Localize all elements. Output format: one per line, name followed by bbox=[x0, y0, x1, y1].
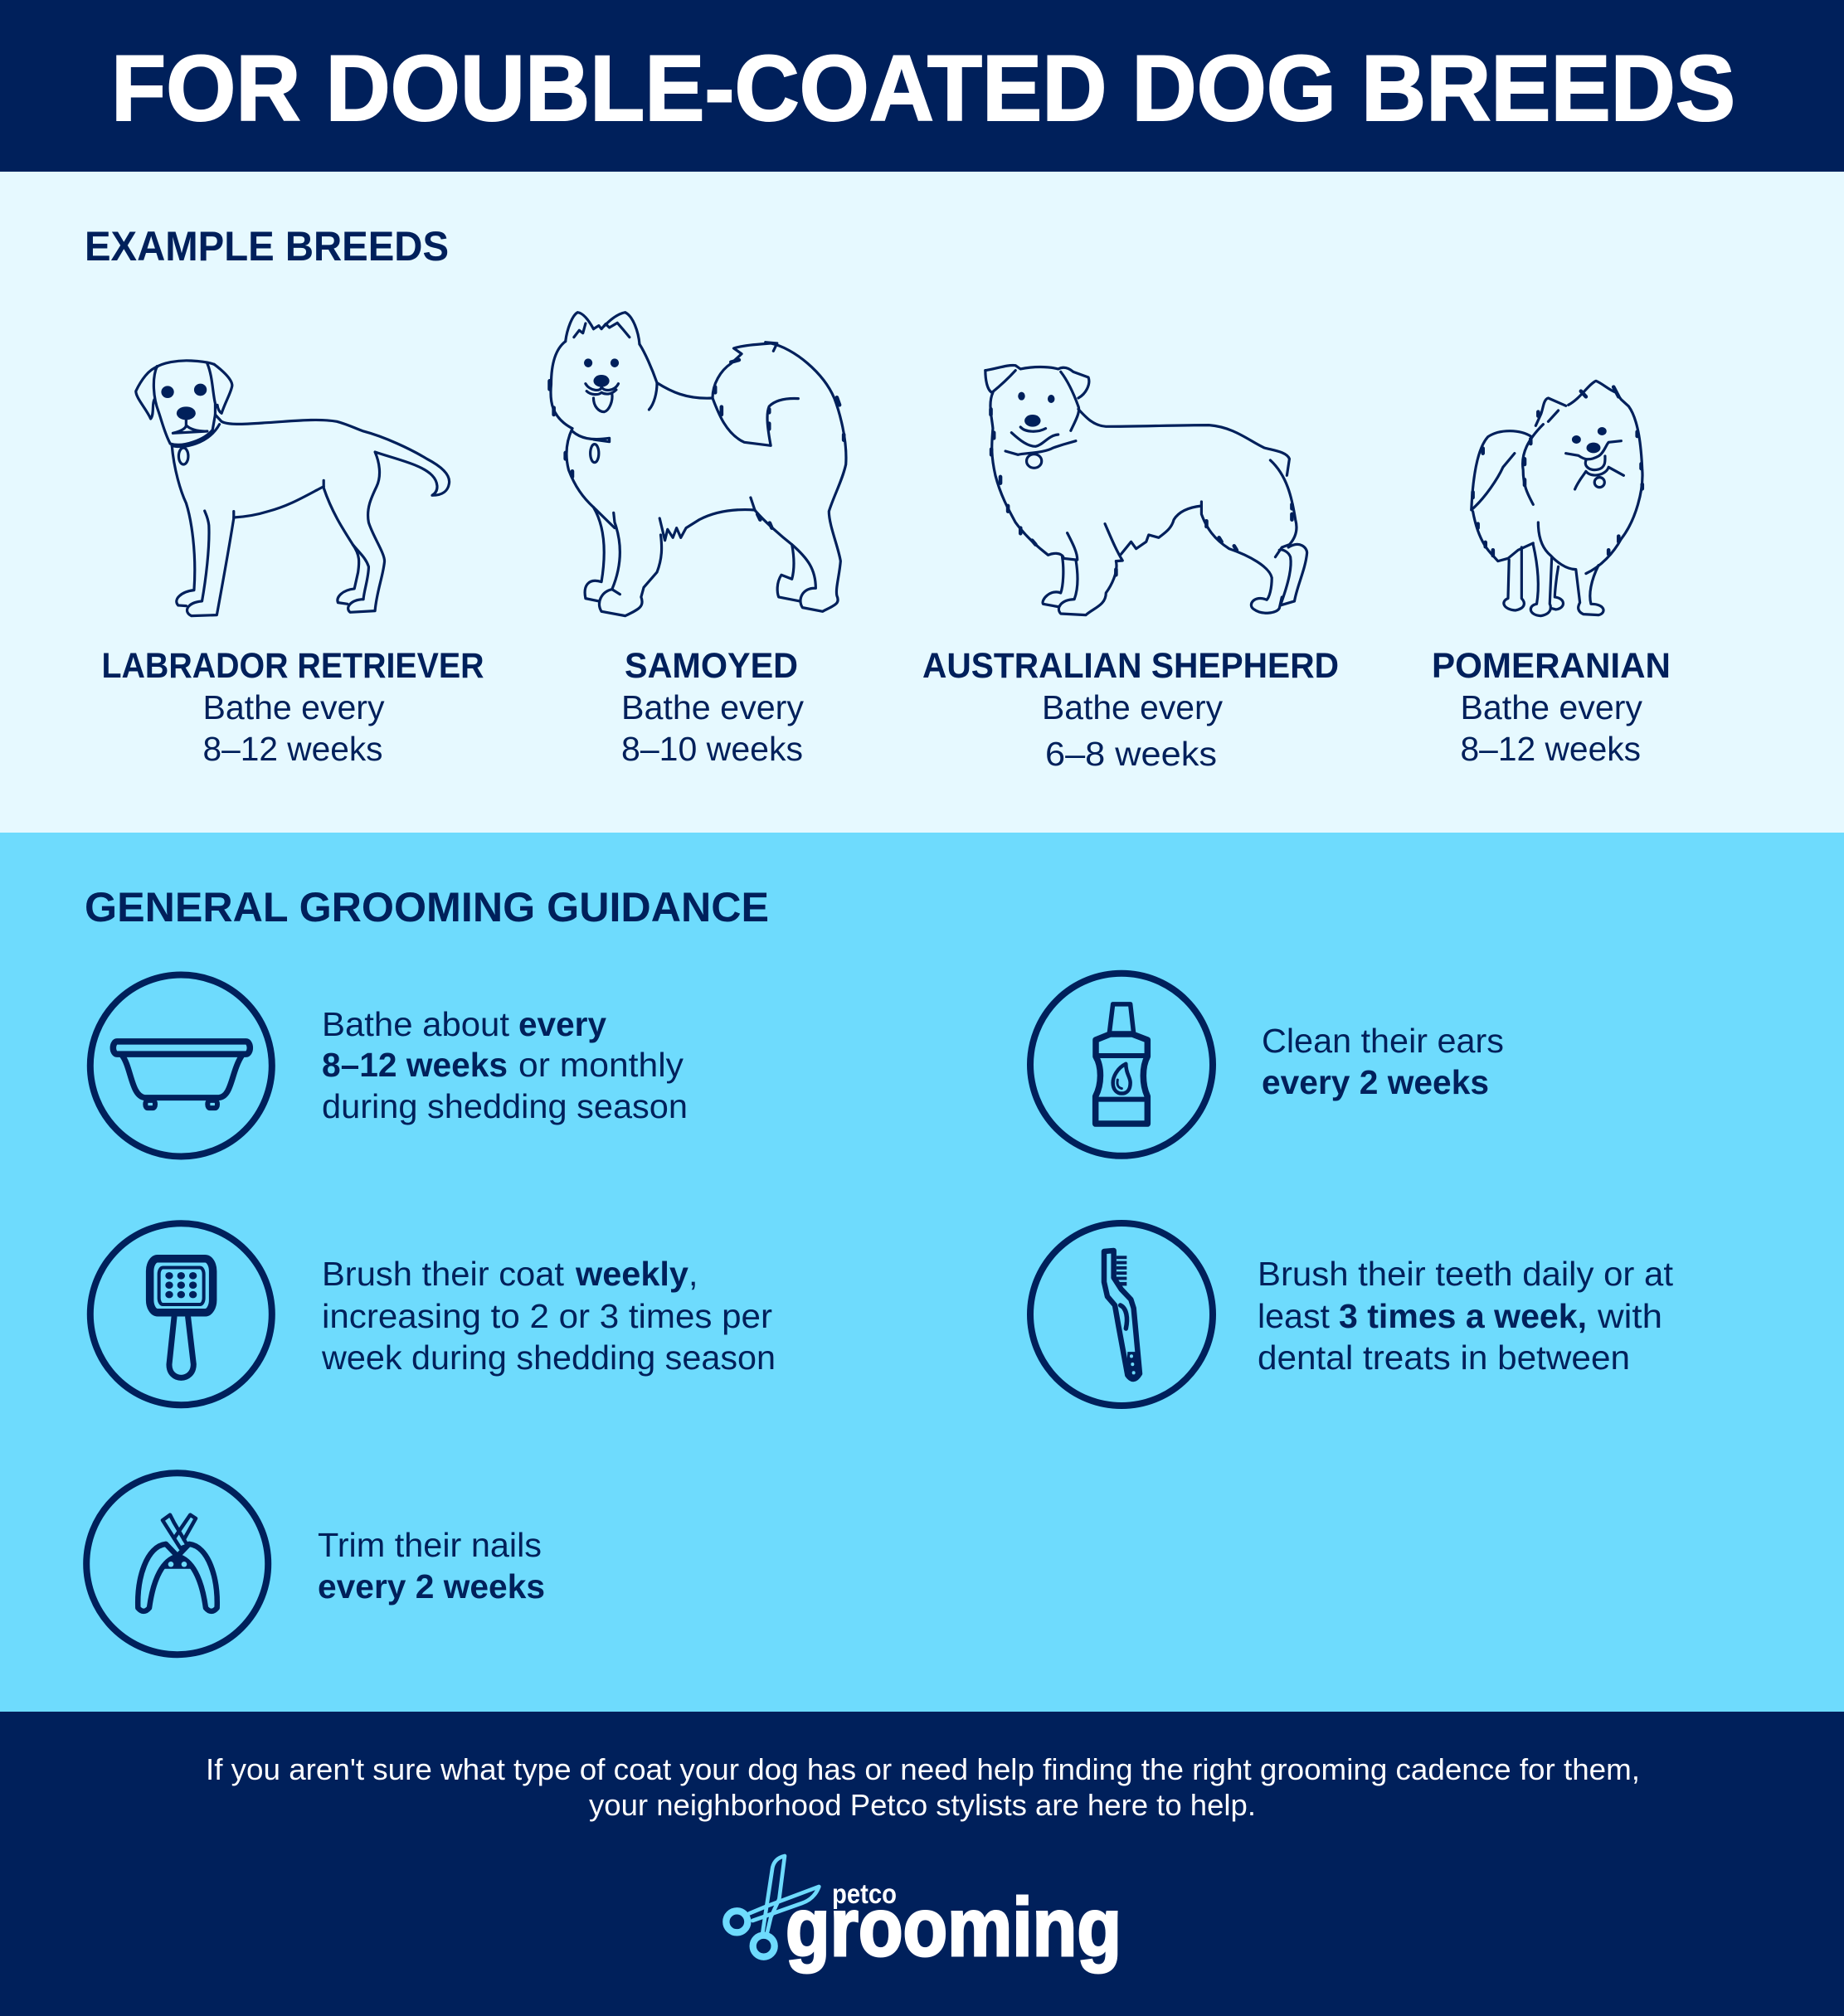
tip text: during shedding season bbox=[322, 1087, 688, 1125]
bathing cadence: 8–12 weeks bbox=[1460, 730, 1641, 768]
tip text: every 2 weeks bbox=[1262, 1063, 1489, 1101]
tip text: with bbox=[1597, 1297, 1662, 1335]
tip: trimming nails bbox=[86, 1473, 545, 1654]
breed name: LABRADOR RETRIEVER bbox=[101, 646, 484, 686]
bathing cadence: 8–10 weeks bbox=[621, 730, 803, 768]
panel: example breeds bbox=[0, 172, 1844, 833]
panel: general grooming guidance bbox=[0, 833, 1844, 1712]
tip: brushing coat bbox=[90, 1223, 776, 1405]
icon: toothbrush bbox=[1030, 1223, 1213, 1406]
bathing cadence: Bathe every bbox=[621, 688, 804, 726]
tip text: 8–12 weeks bbox=[322, 1046, 508, 1084]
tip text: week during shedding season bbox=[321, 1338, 776, 1377]
bathing cadence: 6–8 weeks bbox=[1045, 735, 1217, 773]
title: FOR DOUBLE-COATED DOG BREEDS bbox=[111, 36, 1735, 140]
tip text: 3 times a week, bbox=[1339, 1297, 1587, 1335]
tip text: Brush their coat bbox=[322, 1255, 565, 1293]
wordmark: petco: petco bbox=[832, 1878, 897, 1909]
bathing cadence: Bathe every bbox=[1042, 688, 1223, 726]
breed name: POMERANIAN bbox=[1432, 646, 1671, 686]
tip text: weekly bbox=[575, 1255, 688, 1293]
icon: slicker brush bbox=[90, 1223, 272, 1405]
icon: samoyed bbox=[550, 313, 846, 616]
icon: australian shepherd bbox=[985, 365, 1307, 615]
footer band bbox=[0, 1712, 1844, 2016]
tip text: every bbox=[518, 1005, 606, 1043]
tip text: increasing to 2 or 3 times per bbox=[322, 1297, 772, 1335]
bathing cadence: 8–12 weeks bbox=[202, 730, 383, 768]
header band bbox=[0, 0, 1844, 172]
tip text: , bbox=[688, 1255, 698, 1293]
bathing cadence: Bathe every bbox=[1460, 688, 1642, 726]
icon: labrador retriever bbox=[136, 361, 450, 616]
tip text: every 2 weeks bbox=[318, 1567, 545, 1606]
tip: bathing bbox=[90, 975, 688, 1156]
heading: general grooming guidance: GENERAL GROOMING GUIDANCE bbox=[85, 884, 769, 930]
icon: bathtub bbox=[90, 975, 272, 1156]
tip: brushing teeth bbox=[1030, 1223, 1674, 1406]
icon: scissors bbox=[726, 1856, 819, 1957]
tip: cleaning ears bbox=[1030, 974, 1504, 1156]
bathing cadence: Bathe every bbox=[202, 688, 385, 726]
heading: example breeds: EXAMPLE BREEDS bbox=[85, 223, 449, 270]
footer text: If you aren't sure what type of coat your dog has or need help finding the right grooming cadence for them, bbox=[206, 1752, 1640, 1786]
icon: nail clippers bbox=[86, 1473, 268, 1654]
tip text: Trim their nails bbox=[318, 1526, 542, 1564]
breed: samoyed bbox=[550, 313, 846, 768]
tip text: or monthly bbox=[518, 1046, 684, 1084]
tip text: dental treats in between bbox=[1258, 1338, 1630, 1377]
icon: ear cleaner bottle bbox=[1030, 974, 1213, 1156]
breed name: SAMOYED bbox=[625, 646, 798, 686]
breed: labrador retriever bbox=[101, 361, 484, 768]
breed name: AUSTRALIAN SHEPHERD bbox=[922, 646, 1339, 686]
breed: australian shepherd bbox=[922, 365, 1339, 773]
breed: pomeranian bbox=[1432, 381, 1671, 768]
tip text: Brush their teeth daily or at bbox=[1258, 1255, 1674, 1293]
tip text: least bbox=[1258, 1297, 1331, 1335]
icon: pomeranian bbox=[1472, 381, 1642, 616]
wordmark: grooming: grooming bbox=[786, 1881, 1121, 1973]
footer text: your neighborhood Petco stylists are here to help. bbox=[589, 1788, 1256, 1822]
logo: petco grooming bbox=[726, 1856, 1121, 1973]
tip text: Clean their ears bbox=[1262, 1022, 1504, 1060]
tip text: Bathe about bbox=[322, 1005, 510, 1043]
